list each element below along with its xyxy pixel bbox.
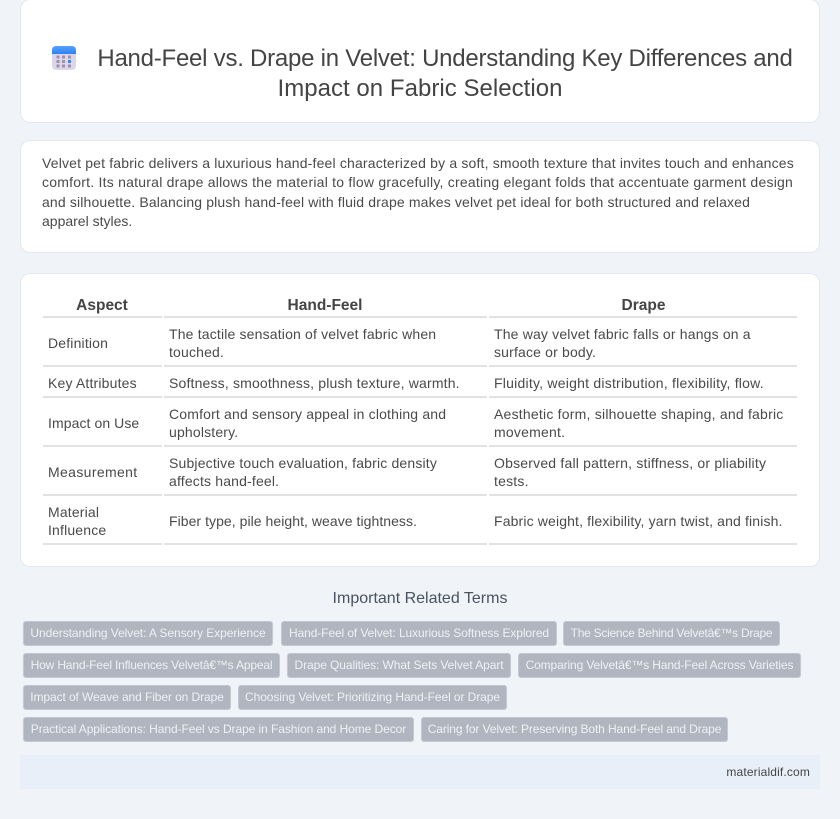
row: definition: surface or body.: [494, 344, 596, 360]
row: key attributes: Fluidity, weight distribution, flexibility, flow.: [494, 375, 764, 391]
tag: [518, 653, 801, 678]
intro panel: [20, 140, 820, 253]
intro text: [42, 155, 794, 229]
tag: Drape Qualities: What Sets Velvet Apart: [294, 658, 503, 672]
title: Impact on Fabric Selection: [278, 75, 562, 102]
tag: [563, 621, 780, 646]
intro text: and silhouette. Balancing plush hand-feel with fluid drape makes velvet pet ideal for both structured and relaxed: [42, 194, 750, 210]
row: impact on use: movement.: [494, 424, 565, 440]
column headings: Aspect: [76, 297, 128, 314]
row: impact on use: Comfort and sensory appeal in clothing and: [169, 406, 446, 422]
tag: Understanding Velvet: A Sensory Experience: [30, 626, 266, 640]
footer bar: [20, 755, 820, 789]
row: measurement: [48, 455, 766, 489]
column headings: [76, 297, 665, 314]
row: definition: The tactile sensation of velvet fabric when: [169, 326, 436, 342]
title: [97, 45, 793, 102]
tag: [421, 717, 728, 742]
tag: [23, 685, 231, 710]
row: material influence: Fabric weight, flexibility, yarn twist, and finish.: [494, 513, 783, 529]
tag: [23, 653, 280, 678]
column headings: Hand-Feel: [288, 297, 362, 314]
intro text: comfort. Its natural drape allows the material to flow gracefully, creating elegant folds that accentuate garment design: [42, 174, 793, 190]
tag: [23, 717, 414, 742]
row: measurement: affects hand-feel.: [169, 473, 279, 489]
row: impact on use: [48, 406, 784, 440]
related terms tags: [23, 621, 801, 742]
tag: Choosing Velvet: Prioritizing Hand-Feel or Drape: [245, 690, 500, 704]
tag: Impact of Weave and Fiber on Drape: [30, 690, 224, 704]
tag: The Science Behind Velvetâ€™s Drape: [571, 626, 772, 640]
tag: [287, 653, 511, 678]
row: measurement: Subjective touch evaluation, fabric density: [169, 455, 437, 471]
footer source: materialdif.com: [726, 765, 810, 779]
row: definition: Definition: [48, 335, 108, 351]
row: impact on use: upholstery.: [169, 424, 238, 440]
comparison table: [43, 297, 797, 545]
table panel: [20, 273, 820, 567]
row: material influence: Material: [48, 504, 99, 520]
row: measurement: Observed fall pattern, stiffness, or pliability: [494, 455, 766, 471]
row: key attributes: Key Attributes: [48, 375, 137, 391]
header panel: [20, 0, 820, 123]
tag: Comparing Velvetâ€™s Hand-Feel Across Varieties: [526, 658, 793, 672]
intro text: apparel styles.: [42, 213, 132, 229]
row: material influence: [48, 504, 783, 538]
tag: [23, 621, 273, 646]
row: measurement: Measurement: [48, 464, 138, 480]
tag: Practical Applications: Hand-Feel vs Drape in Fashion and Home Decor: [31, 722, 406, 736]
column headings: Drape: [622, 297, 665, 314]
tag: How Hand-Feel Influences Velvetâ€™s Appeal: [31, 658, 272, 672]
row: definition: [48, 326, 751, 360]
row: definition: The way velvet fabric falls or hangs on a: [494, 326, 751, 342]
row: material influence: Fiber type, pile height, weave tightness.: [169, 513, 417, 529]
tag: [238, 685, 507, 710]
intro text: Velvet pet fabric delivers a luxurious hand-feel characterized by a soft, smooth texture that invites touch and enhances: [42, 155, 794, 171]
tag: [281, 621, 557, 646]
row: definition: touched.: [169, 344, 224, 360]
row: measurement: tests.: [494, 473, 529, 489]
row: material influence: Influence: [48, 522, 106, 538]
row: impact on use: Impact on Use: [48, 415, 139, 431]
tag: Caring for Velvet: Preserving Both Hand-Feel and Drape: [428, 722, 721, 736]
title: Hand-Feel vs. Drape in Velvet: Understanding Key Differences and: [97, 45, 793, 72]
tag: Hand-Feel of Velvet: Luxurious Softness Explored: [289, 626, 549, 640]
row: impact on use: Aesthetic form, silhouette shaping, and fabric: [494, 406, 784, 422]
row: key attributes: [48, 375, 764, 391]
row: key attributes: Softness, smoothness, plush texture, warmth.: [169, 375, 460, 391]
related terms heading: Important Related Terms: [333, 590, 507, 607]
icon: calendar: [52, 46, 76, 70]
